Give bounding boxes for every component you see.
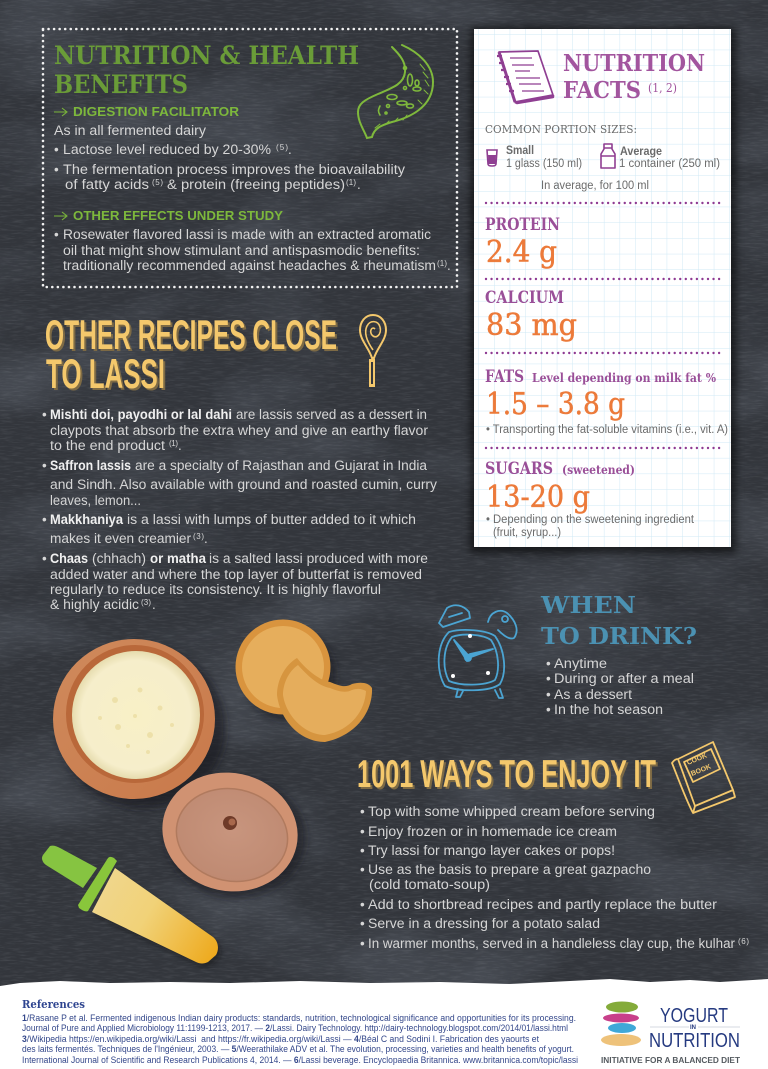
logo: yogurt in nutrition [601,1002,741,1065]
nutrient: protein: PROTEIN [485,215,560,235]
photo: clay lid [151,760,309,904]
text: digestion details: . [357,177,361,192]
panel: when to drink [439,592,697,717]
text: ways list: Add to shortbread recipes and partly replace the butter [368,897,718,912]
heading: other recipes: OTHER RECIPES CLOSE [47,313,339,360]
panel: nutrition and health benefits [43,29,457,287]
text: digestion details: The fermentation process improves the bioavailability [63,162,405,177]
text: recipe list: makes it even creamier [50,531,191,546]
heading: other recipes [45,311,339,399]
panel: 1001 ways to enjoy it [357,742,749,951]
text: other effects details: . [447,258,451,273]
text: recipe list: and Sindh. Also available with ground and roasted cumin, curry [50,477,437,492]
nutrient: sugars: (fruit, syrup...) [493,527,561,539]
text: recipe list: is a lassi with lumps of butter added to it which [127,512,416,527]
icon: glass [487,150,497,166]
logo: yogurt in nutrition: IN [690,1025,696,1031]
text: recipe list: to the end product [50,438,165,453]
heading: nutrition facts: NUTRITION [563,50,705,77]
text: recipe list: Makkhaniya [50,512,123,527]
text: reference list: International Journal of Scientific and Research Publications 4, 2014. — 6/Lassi beverage. Encyclopaedia Britannica. www.britannica.com/topic/lassi [22,1055,578,1065]
text: other effects details: traditionally recommended against headaches & rheumatism [63,258,436,273]
text: ways list: • [360,936,365,951]
text: recipe list: are lassis served as a dessert in [236,407,427,422]
text: recipe list: (3) [141,598,151,607]
text: when to drink list: • [546,656,551,671]
heading: references: References [22,998,85,1011]
text: ways list: Try lassi for mango layer cakes or pops! [368,843,615,858]
text: ways list: • [360,804,365,819]
nutrient: sugars: • Depending on the sweetening ingredient [486,514,695,526]
text: when to drink list: • [546,687,551,702]
text: when to drink list: During or after a meal [554,671,694,686]
text: ways list: Top with some whipped cream before serving [368,804,655,819]
heading: other recipes: OTHER RECIPES CLOSE [45,311,337,358]
heading: when to drink [540,592,697,650]
text: digestion details: & protein (freeing peptides) [167,177,345,192]
text: recipe list: added water and where the top layer of butterfat is removed [50,567,422,582]
icon: notebook [497,51,553,103]
text: digestion details: (1) [346,178,356,187]
nutrient: fats: Level depending on milk fat % [532,371,717,385]
dotted border [43,29,457,287]
text: digestion details: . [288,142,292,157]
text: ways list: • [360,843,365,858]
text: recipe list: & highly acidic [50,597,139,612]
heading: other recipes: TO LASSI [48,352,167,399]
icon: whisk [360,315,386,387]
heading: other recipes: TO LASSI [46,350,165,397]
text: when to drink list: Anytime [554,656,607,671]
text: reference list: Journal of Pure and Applied Microbiology 11:1199-1213, 2017. — 2/Lassi. Dairy Technology. http://dairy-technology.blogspot.com/2014/01/lassi.html [22,1023,568,1033]
text: digestion details: As in all fermented dairy [54,123,206,138]
text: recipe list: Mishti doi, payodhi or lal dahi [50,407,232,422]
text: recipe list: or matha [150,551,206,566]
text: ways list: In warmer months, served in a handleless clay cup, the kulhar [368,936,735,951]
text: when to drink list [546,656,694,717]
text: average portion: 1 container (250 ml) [619,158,720,170]
logo: yogurt in nutrition: NUTRITION [649,1030,740,1052]
text: ways list: Enjoy frozen or in homemade ice cream [368,824,617,839]
text: recipe list: . [178,438,182,453]
photo: cookies [236,620,372,742]
text: other effects details [54,227,451,273]
text: recipe list: • [42,551,47,566]
text: when to drink list: As a dessert [554,687,632,702]
nutrient: sugars: SUGARS [485,459,553,479]
photo: clay bowl of lassi [53,639,226,808]
heading: nutrition and health benefits: NUTRITION & HEALTH [54,41,359,70]
nutrient: fats: 1.5 – 3.8 g [486,387,625,422]
nutrient: protein [485,215,560,270]
text: digestion details [54,123,405,192]
text: recipe list: is a salted lassi produced with more [209,551,428,566]
nutrient: fats: FATS [485,367,524,387]
text: reference list: des laits fermentés. Techniques de l'Ingénieur, 2003. — 5/Weerathilake ADV et al. The evolution, processing, varieties and health benefits of yogurt. [22,1044,574,1054]
text: ways list: Use as the basis to prepare a great gazpacho [368,862,651,877]
text: average portion [619,146,720,170]
text: recipe list: . [204,531,208,546]
text: recipe list: • [42,512,47,527]
text: ways list: (6) [738,937,749,946]
text: ways list: • [360,897,365,912]
nutrient: sugars: 13-20 g [486,480,590,515]
text: other effects details: • [54,227,59,242]
text: digestion details: (5) [276,143,288,152]
text: recipe list: Chaas [50,551,88,566]
nutrient: fats: • Transporting the fat-soluble vitamins (i.e., vit. A) [486,424,728,436]
text: ways list: (cold tomato-soup) [369,877,490,892]
footer: references and logo [0,979,768,1069]
icon: stomach [358,45,433,138]
icon: cookbook: BOOK [690,763,712,778]
heading: nutrition and health benefits [54,41,359,99]
heading: when to drink: WHEN [540,592,636,619]
text: average portion: Average [620,146,662,158]
text: other effects details: Rosewater flavored lassi is made with an extracted aromatic [63,227,431,242]
subheading: other effects under study: OTHER EFFECTS UNDER STUDY [73,208,283,223]
heading: nutrition and health benefits: BENEFITS [54,70,188,99]
text: recipe list: Saffron lassis [50,458,131,473]
heading: when to drink: TO DRINK? [541,623,697,650]
text: when to drink list: • [546,671,551,686]
nutrient: calcium: CALCIUM [485,288,564,308]
text: recipe list: (1) [169,439,178,448]
text: when to drink list: In the hot season [554,702,663,717]
text: reference list: 1/Rasane P et al. Fermented indigenous Indian dairy products: standards, nutrition, technological significance and opportunities for its processing. [22,1013,576,1023]
nutrient: fats [485,367,728,436]
text: common portion sizes: COMMON PORTION SIZES: [485,122,637,136]
nutrient: calcium [485,288,577,343]
text: small portion: 1 glass (150 ml) [506,158,582,170]
heading: nutrition facts: FACTS [563,77,641,104]
text: recipe list: • [42,407,47,422]
text: in average for 100 ml: In average, for 100 ml [541,180,649,192]
nutrient: sugars: (sweetened) [562,463,635,477]
text: ways list: • [360,862,365,877]
icon: bottle [601,144,615,168]
heading: nutrition facts [563,50,705,104]
text: ways list [360,804,749,951]
nutrient: sugars [485,459,695,539]
text: recipe list: (chhach) [92,551,146,566]
subheading: digestion facilitator: DIGESTION FACILITATOR [73,104,240,119]
text: small portion [506,145,582,170]
text: reference list: 3/Wikipedia https://en.wikipedia.org/wiki/Lassi and https://fr.wikipedia.org/wiki/Lassi — 4/Béal C and Sodini I. Fabrication des yaourts et [22,1034,539,1044]
text: ways list: • [360,916,365,931]
icon: cookbook [672,742,735,813]
text: digestion details: of fatty acids [65,177,149,192]
text: recipe list: . [152,597,156,612]
text: ways list: • [360,824,365,839]
text: recipe list: leaves, lemon... [50,493,141,508]
text: reference list [22,1013,578,1065]
text: digestion details: (5) [152,178,163,187]
text: ways list: Serve in a dressing for a potato salad [368,916,600,931]
logo: yogurt in nutrition: YOGURT [660,1005,728,1027]
text: recipe list [42,407,437,612]
nutrient: calcium: 83 mg [486,308,577,343]
text: other effects details: (1) [437,259,447,268]
text: small portion: Small [506,145,534,157]
text: recipe list: are a specialty of Rajasthan and Gujarat in India [135,458,427,473]
photo: mango ice pop [42,846,221,968]
logo: yogurt in nutrition: INITIATIVE FOR A BALANCED DIET [601,1055,741,1065]
icon: alarm clock [439,605,517,698]
clock dots [451,634,490,678]
text: digestion details: Lactose level reduced by 20-30% [63,142,271,157]
text: digestion details: • [54,142,59,157]
panel: other recipes close to lassi [42,311,437,612]
panel: nutrition facts card [470,27,736,553]
icon: cookbook: COOK [686,752,708,767]
text: recipe list: claypots that absorb the extra whey and give an earthy flavor [50,423,429,438]
text: recipe list: regularly to reduce its consistency. It is highly flavorful [50,582,381,597]
text: recipe list: • [42,458,47,473]
text: when to drink list: • [546,702,551,717]
nutrient: protein: 2.4 g [486,235,557,270]
heading: nutrition facts: (1, 2) [648,81,677,95]
text: other effects details: oil that might show stimulant and antispasmodic benefits: [63,243,420,258]
text: recipe list: (3) [193,532,204,541]
text: digestion details: • [54,162,59,177]
